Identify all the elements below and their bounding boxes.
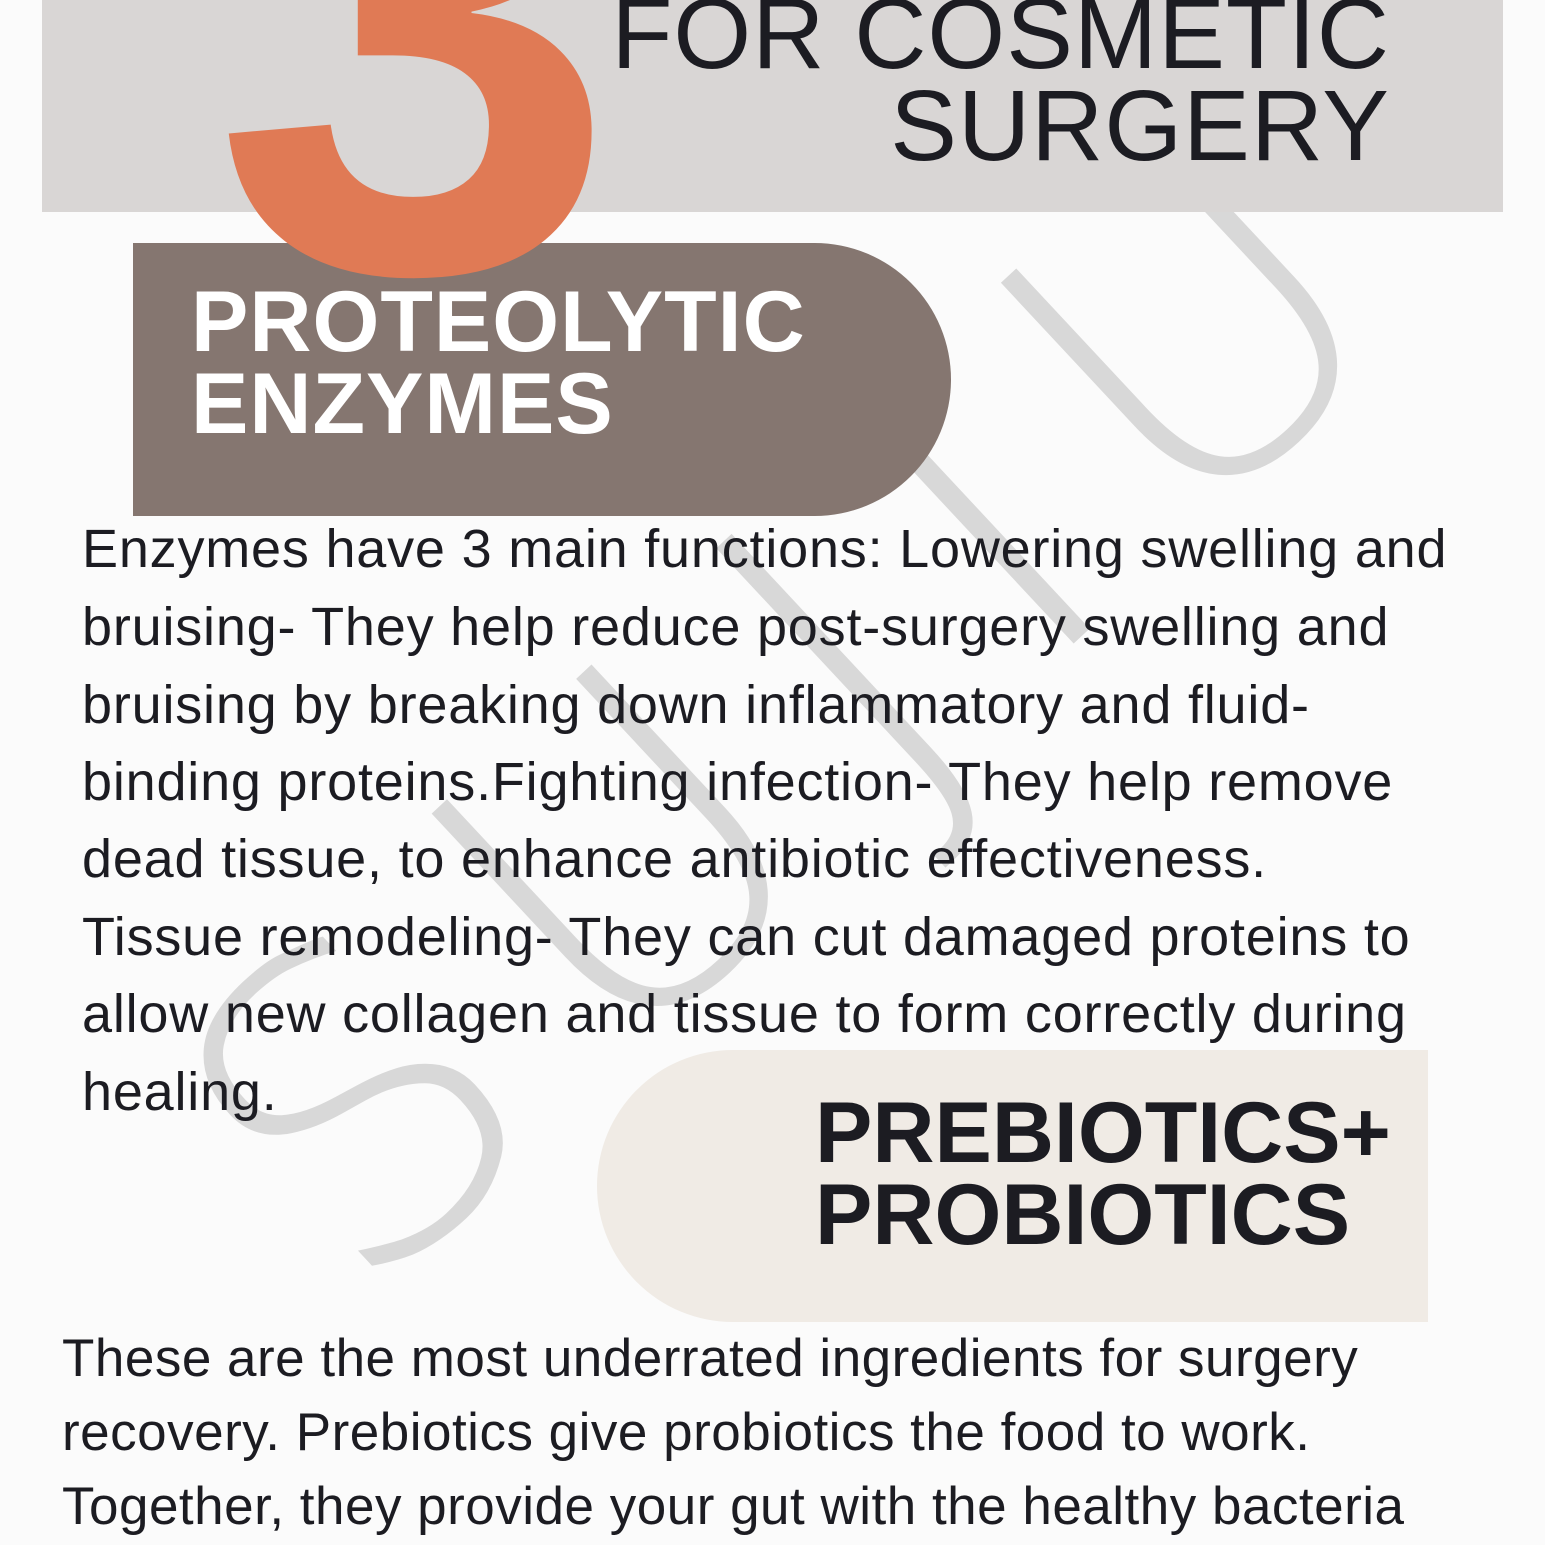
panel: proteolytic enzymes heading	[133, 243, 951, 516]
text block: enzymes: bruising by breaking down inflammatory and fluid-	[82, 675, 1310, 735]
text block: enzymes: allow new collagen and tissue to form correctly during	[82, 984, 1407, 1044]
text block: prebiotics: These are the most underrated ingredients for surgery	[62, 1329, 1358, 1388]
text block: prebiotics: Together, they provide your gut with the healthy bacteria	[62, 1477, 1405, 1536]
heading: prebiotics probiotics	[815, 1085, 1391, 1263]
heading: proteolytic enzymes	[191, 274, 806, 452]
text block: enzymes: dead tissue, to enhance antibiotic effectiveness.	[82, 829, 1267, 889]
panel: prebiotics heading	[597, 1050, 1428, 1322]
heading: proteolytic enzymes: ENZYMES	[191, 356, 614, 452]
text block: enzymes: bruising- They help reduce post-surgery swelling and	[82, 597, 1389, 657]
title: SURGERY	[890, 70, 1390, 182]
text block: enzymes: Enzymes have 3 main functions: Lowering swelling and	[82, 519, 1447, 579]
heading: prebiotics probiotics: PROBIOTICS	[815, 1167, 1350, 1263]
title	[611, 0, 1390, 182]
text block: enzymes: binding proteins.Fighting infection- They help remove	[82, 752, 1393, 812]
text block: prebiotics: recovery. Prebiotics give probiotics the food to work.	[62, 1403, 1311, 1462]
text block: enzymes: healing.	[82, 1062, 278, 1122]
text block: enzymes: Tissue remodeling- They can cut damaged proteins to	[82, 907, 1410, 967]
heading: proteolytic enzymes: PROTEOLYTIC	[191, 274, 806, 370]
heading: prebiotics probiotics: PREBIOTICS+	[815, 1085, 1391, 1181]
text block: prebiotics	[62, 1329, 1405, 1536]
text block: enzymes	[82, 519, 1447, 1122]
watermark: SUJIU	[88, 0, 1530, 1384]
header panel	[42, 0, 1503, 212]
